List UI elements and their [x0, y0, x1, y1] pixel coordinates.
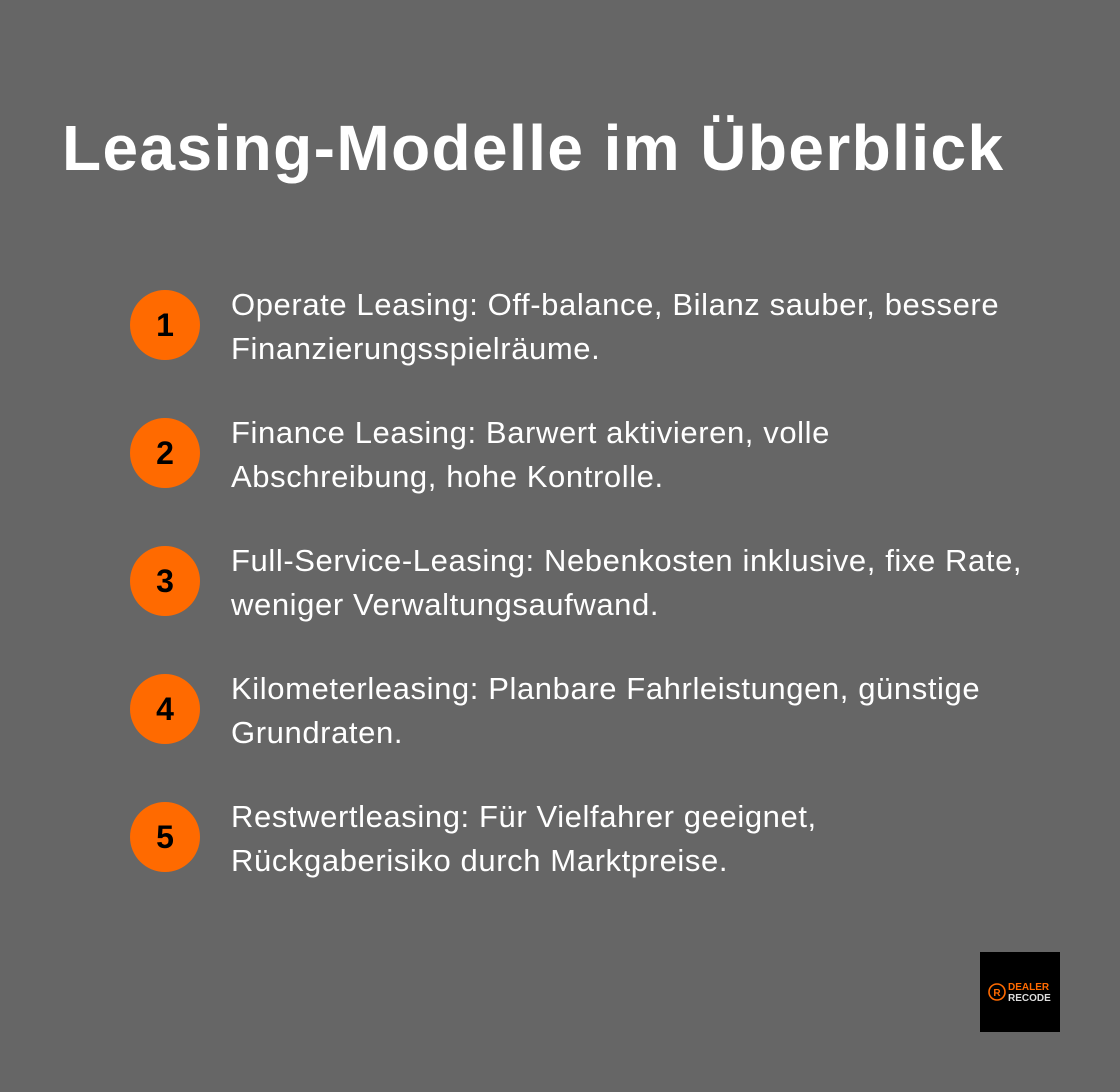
text 1: Finanzierungsspielräume.	[231, 331, 600, 366]
item 4	[130, 671, 980, 750]
text 1	[231, 287, 999, 366]
text 4	[231, 671, 980, 750]
logo: DEALER	[1008, 982, 1050, 993]
text 2: Abschreibung, hohe Kontrolle.	[231, 459, 664, 494]
text 3	[231, 543, 1022, 622]
item 5	[130, 799, 817, 878]
badge 5: 5	[156, 819, 174, 855]
badge 2: 2	[156, 435, 174, 471]
item 3	[130, 543, 1022, 622]
item 1	[130, 287, 999, 366]
badge 1	[130, 290, 200, 360]
badge 1: 1	[156, 307, 174, 343]
logo	[980, 952, 1060, 1032]
badge 3: 3	[156, 563, 174, 599]
text 4: Kilometerleasing: Planbare Fahrleistungen, günstige	[231, 671, 980, 706]
badge 3	[130, 546, 200, 616]
title: Leasing-Modelle im Überblick	[62, 112, 1005, 184]
text 4: Grundraten.	[231, 715, 403, 750]
badge 4	[130, 674, 200, 744]
item 2	[130, 415, 830, 494]
badge 2	[130, 418, 200, 488]
text 5	[231, 799, 817, 878]
text 3: Full-Service-Leasing: Nebenkosten inklusive, fixe Rate,	[231, 543, 1022, 578]
logo: R	[993, 988, 1001, 999]
text 5: Rückgaberisiko durch Marktpreise.	[231, 843, 728, 878]
badge 5	[130, 802, 200, 872]
text 5: Restwertleasing: Für Vielfahrer geeignet,	[231, 799, 817, 834]
text 2	[231, 415, 830, 494]
logo: RECODE	[1008, 993, 1051, 1004]
text 2: Finance Leasing: Barwert aktivieren, volle	[231, 415, 830, 450]
text 3: weniger Verwaltungsaufwand.	[231, 587, 659, 622]
badge 4: 4	[156, 691, 174, 727]
text 1: Operate Leasing: Off-balance, Bilanz sauber, bessere	[231, 287, 999, 322]
